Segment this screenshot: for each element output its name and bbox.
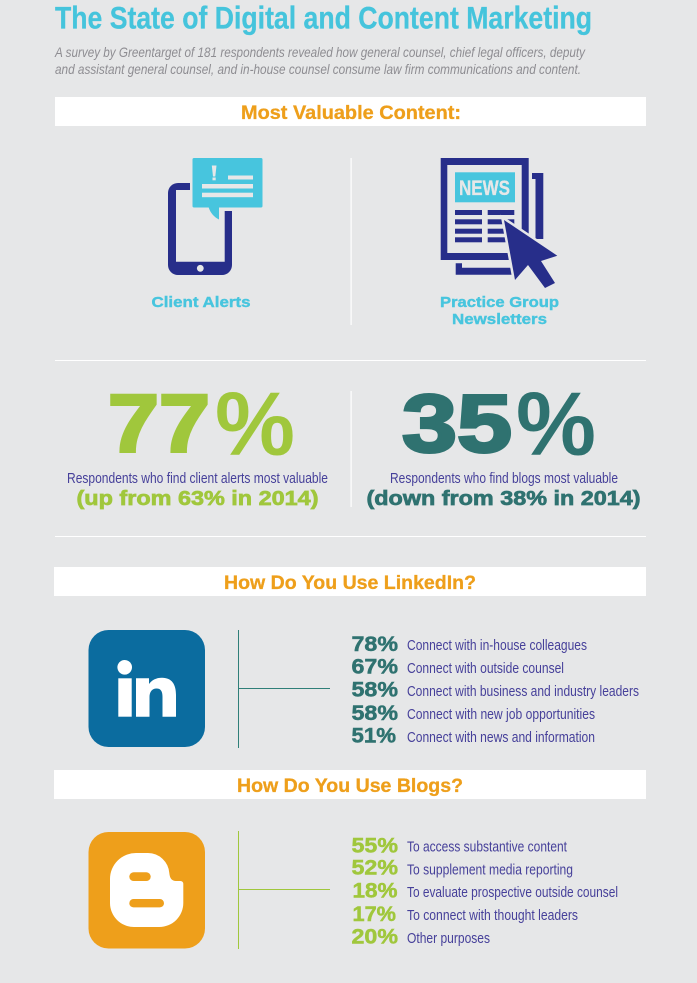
list: linkedin uses: 58% bbox=[352, 679, 398, 702]
label: practice group newsletters: Practice Group bbox=[440, 294, 559, 311]
icon: newspaper with cursor bbox=[441, 158, 557, 288]
stat: 35 percent: % bbox=[516, 375, 596, 475]
stat: 35 percent bbox=[366, 375, 640, 510]
list: blog uses: 20% bbox=[352, 925, 398, 948]
list: blog uses: To evaluate prospective outside counsel bbox=[407, 884, 618, 901]
list: linkedin uses: 58% bbox=[352, 702, 398, 725]
stat: 35 percent: Respondents who find blogs most valuable bbox=[390, 470, 618, 487]
list: blog uses: 52% bbox=[352, 857, 398, 880]
list: blog uses: To supplement media reporting bbox=[407, 861, 573, 878]
list: linkedin uses: 51% bbox=[352, 725, 396, 748]
heading: linkedin bbox=[54, 567, 646, 596]
list: blog uses: Other purposes bbox=[407, 930, 490, 947]
heading: blogs: How Do You Use Blogs? bbox=[237, 776, 463, 797]
list: blog uses: To access substantive content bbox=[407, 839, 568, 856]
icon: newspaper with cursor: NEWS bbox=[459, 177, 510, 200]
label: client alerts: Client Alerts bbox=[152, 294, 250, 311]
list: linkedin uses: 67% bbox=[352, 656, 398, 679]
list: blog uses bbox=[352, 835, 618, 948]
list: linkedin uses: 78% bbox=[352, 633, 398, 656]
list: blog uses: To connect with thought leaders bbox=[407, 907, 578, 924]
icon: blogger bbox=[88, 832, 205, 948]
list: blog uses: 18% bbox=[352, 880, 398, 903]
icon: tablet with alert bubble bbox=[168, 158, 262, 275]
heading: most valuable content bbox=[55, 97, 646, 126]
icon: linkedin bbox=[88, 630, 205, 747]
list: linkedin uses: Connect with outside counsel bbox=[407, 660, 564, 677]
list: blog uses: 17% bbox=[352, 903, 396, 926]
heading: linkedin: How Do You Use LinkedIn? bbox=[224, 573, 476, 594]
stat: 77 percent: 77 bbox=[108, 378, 210, 470]
list: linkedin uses: Connect with in-house colleagues bbox=[407, 637, 587, 654]
stat: 77 percent: Respondents who find client alerts most valuable bbox=[67, 470, 328, 487]
list: linkedin uses bbox=[352, 633, 639, 748]
stat: 35 percent: (down from 38% in 2014) bbox=[366, 488, 640, 510]
list: linkedin uses: Connect with business and industry leaders bbox=[407, 683, 639, 700]
intro text: A survey by Greentarget of 181 respondents revealed how general counsel, chief legal officers, deputy bbox=[54, 44, 586, 60]
label: practice group newsletters: Newsletters bbox=[452, 311, 547, 328]
connector: blogs bbox=[238, 831, 330, 949]
stat: 77 percent: (up from 63% in 2014) bbox=[76, 488, 318, 510]
heading: most valuable content: Most Valuable Content: bbox=[241, 103, 461, 124]
stat: 77 percent bbox=[67, 375, 328, 510]
heading: blogs bbox=[54, 770, 646, 799]
stat: 77 percent: % bbox=[215, 375, 295, 475]
label: practice group newsletters bbox=[440, 294, 559, 328]
intro text bbox=[54, 44, 586, 77]
list: linkedin uses: Connect with new job opportunities bbox=[407, 706, 595, 723]
list: blog uses: 55% bbox=[352, 835, 398, 858]
connector: linkedin bbox=[238, 630, 330, 748]
title: The State of Digital and Content Marketing bbox=[55, 0, 592, 36]
stat: 35 percent: 35 bbox=[402, 378, 512, 470]
intro text: and assistant general counsel, and in-house counsel consume law firm communications and content. bbox=[55, 61, 581, 77]
list: linkedin uses: Connect with news and information bbox=[407, 729, 595, 746]
